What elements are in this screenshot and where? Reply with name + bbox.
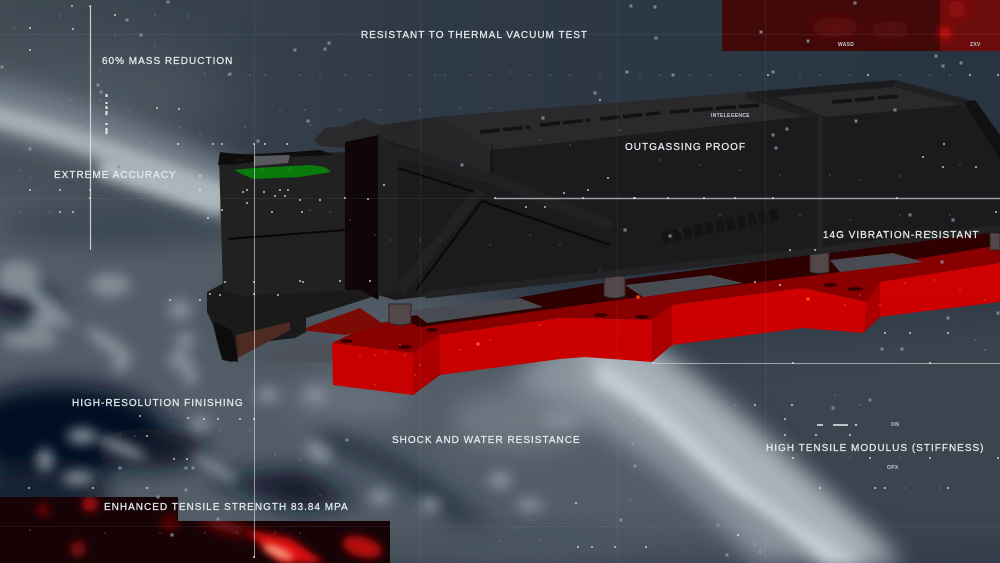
label: outgassing proof: OUTGASSING PROOF [625, 142, 746, 153]
standoffs [389, 233, 1000, 325]
small label: on: ON [891, 422, 899, 428]
atmosphere arc [0, 102, 905, 563]
red panel: bottom left [0, 496, 390, 563]
label: high-resolution finishing: HIGH-RESOLUTION FINISHING [72, 398, 244, 409]
red panel: top right [722, 0, 1000, 51]
upper bracket [314, 118, 380, 148]
red mounting plate [262, 226, 1000, 395]
lower left bracket [207, 284, 372, 362]
label: 60% mass reduction: 60% MASS REDUCTION [102, 56, 233, 67]
main body [314, 80, 1000, 300]
label: shock and water resistance: SHOCK AND WATER RESISTANCE [392, 435, 581, 446]
label: enhanced tensile strength: ENHANCED TENSILE STRENGTH 83.84 MPA [104, 502, 349, 513]
top faces [436, 92, 820, 150]
frame ribs [398, 152, 612, 290]
front module [218, 150, 378, 296]
satellite model [207, 80, 1000, 395]
green top panel [234, 165, 331, 179]
planet surface blotches [0, 203, 640, 558]
label: extreme accuracy: EXTREME ACCURACY [54, 170, 177, 181]
small label: zxv: ZXV [970, 42, 981, 48]
small label: opx: OPX [887, 465, 898, 471]
embossed lettering [480, 96, 900, 132]
label: resistant to thermal vacuum test: RESISTANT TO THERMAL VACUUM TEST [361, 30, 588, 41]
small label: wasd: WASD [838, 42, 854, 48]
label: high tensile modulus: HIGH TENSILE MODULUS (STIFFNESS) [766, 443, 985, 454]
small label: intelegence: INTELEGENCE [711, 113, 750, 119]
label: 14g vibration-resistant: 14G VIBRATION-RESISTANT [823, 230, 980, 241]
